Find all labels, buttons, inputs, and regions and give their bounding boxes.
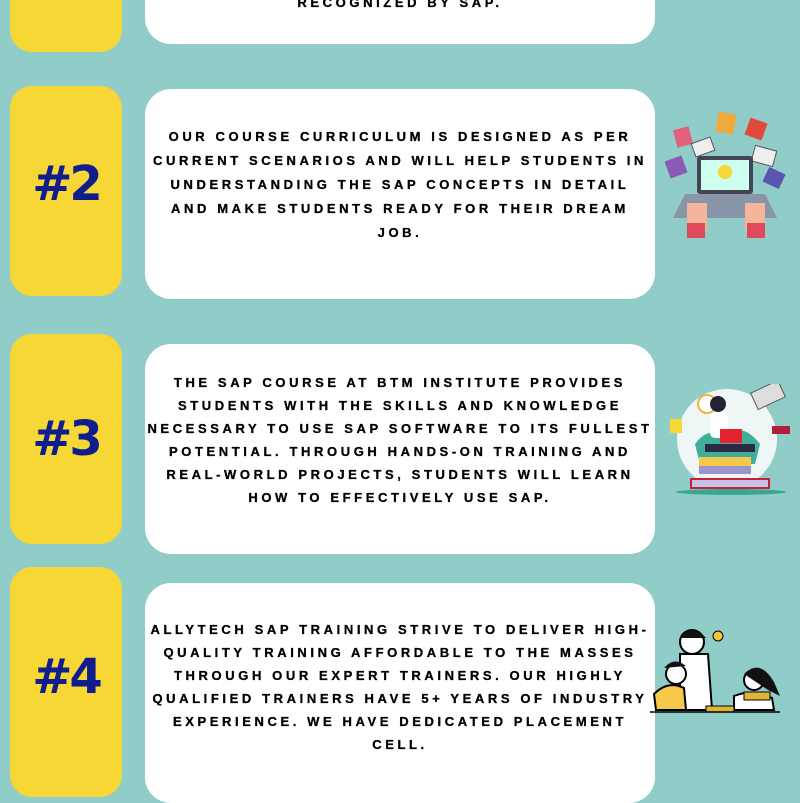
- text #4: THROUGH OUR EXPERT TRAINERS. OUR HIGHLY: [174, 668, 626, 683]
- text #4: CELL.: [372, 737, 428, 752]
- panel: #3: [10, 334, 790, 554]
- text #3: STUDENTS WITH THE SKILLS AND KNOWLEDGE: [178, 398, 622, 413]
- number #2: #2: [32, 156, 100, 212]
- text #3: NECESSARY TO USE SAP SOFTWARE TO ITS FULLEST: [147, 421, 653, 436]
- text #2: UNDERSTANDING THE SAP CONCEPTS IN DETAIL: [171, 177, 629, 192]
- text #2: CURRENT SCENARIOS AND WILL HELP STUDENTS IN: [153, 153, 647, 168]
- number #3: #3: [32, 411, 100, 467]
- icon: woman on books: [670, 384, 790, 495]
- text #4: QUALITY TRAINING AFFORDABLE TO THE MASSES: [163, 645, 637, 660]
- text #3: THE SAP COURSE AT BTM INSTITUTE PROVIDES: [174, 375, 626, 390]
- text #2: AND MAKE STUDENTS READY FOR THEIR DREAM: [171, 201, 629, 216]
- text #2: [153, 129, 647, 240]
- icon: laptop with books: [665, 112, 786, 238]
- text #4: QUALIFIED TRAINERS HAVE 5+ YEARS OF INDUSTRY: [152, 691, 648, 706]
- text #2: OUR COURSE CURRICULUM IS DESIGNED AS PER: [169, 129, 631, 144]
- icon: three people with idea: [650, 629, 780, 713]
- text #4: EXPERIENCE. WE HAVE DEDICATED PLACEMENT: [173, 714, 627, 729]
- text #4: ALLYTECH SAP TRAINING STRIVE TO DELIVER HIGH-: [150, 622, 650, 637]
- panel: #1 (partial): [10, 0, 655, 52]
- number #4: #4: [32, 649, 100, 705]
- text #4: [150, 622, 650, 752]
- text #2: JOB.: [378, 225, 422, 240]
- panel: #2: [10, 86, 786, 299]
- text #3: [147, 375, 653, 505]
- text #3: HOW TO EFFECTIVELY USE SAP.: [248, 490, 552, 505]
- text #3: REAL-WORLD PROJECTS, STUDENTS WILL LEARN: [166, 467, 634, 482]
- text #3: POTENTIAL. THROUGH HANDS-ON TRAINING AND: [169, 444, 631, 459]
- panel: #4: [10, 567, 780, 803]
